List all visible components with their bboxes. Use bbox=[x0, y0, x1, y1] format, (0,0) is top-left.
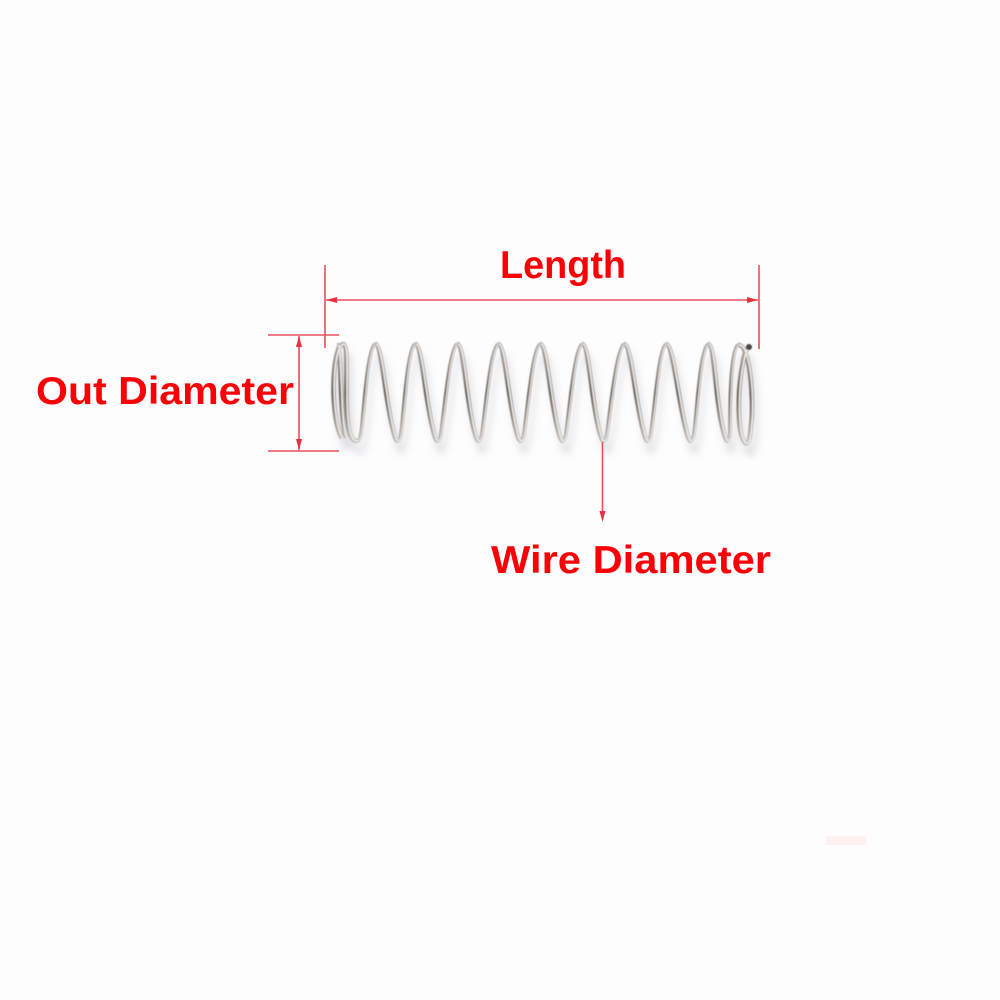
length label: Length bbox=[500, 244, 626, 287]
length dimension bbox=[325, 265, 759, 349]
wire diameter arrow bbox=[600, 442, 606, 522]
wire end bbox=[746, 344, 752, 350]
out diameter label: Out Diameter bbox=[36, 370, 294, 413]
coil front strands bbox=[333, 344, 753, 443]
coil shadow bbox=[337, 355, 756, 454]
faint pink smudge bbox=[826, 836, 866, 845]
outer diameter dimension bbox=[268, 335, 339, 451]
coil back strands bbox=[357, 344, 739, 441]
spring coil bbox=[333, 344, 756, 454]
wire diameter label: Wire Diameter bbox=[491, 539, 771, 582]
